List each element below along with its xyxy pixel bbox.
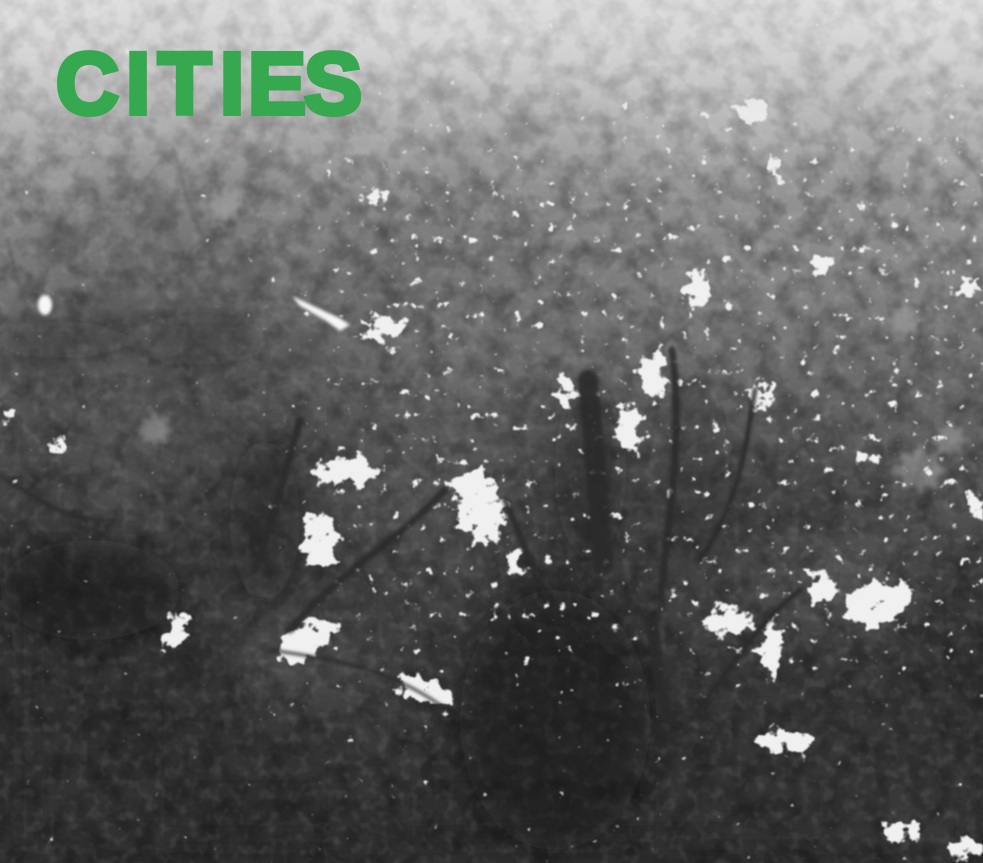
bright highlights (38, 295, 350, 331)
title: CITIES (56, 36, 362, 132)
tree trunk and branches (0, 148, 800, 720)
large leaves, upper left and right (5, 69, 969, 497)
dark tree masses (0, 315, 730, 850)
top haze gradient (0, 0, 983, 200)
